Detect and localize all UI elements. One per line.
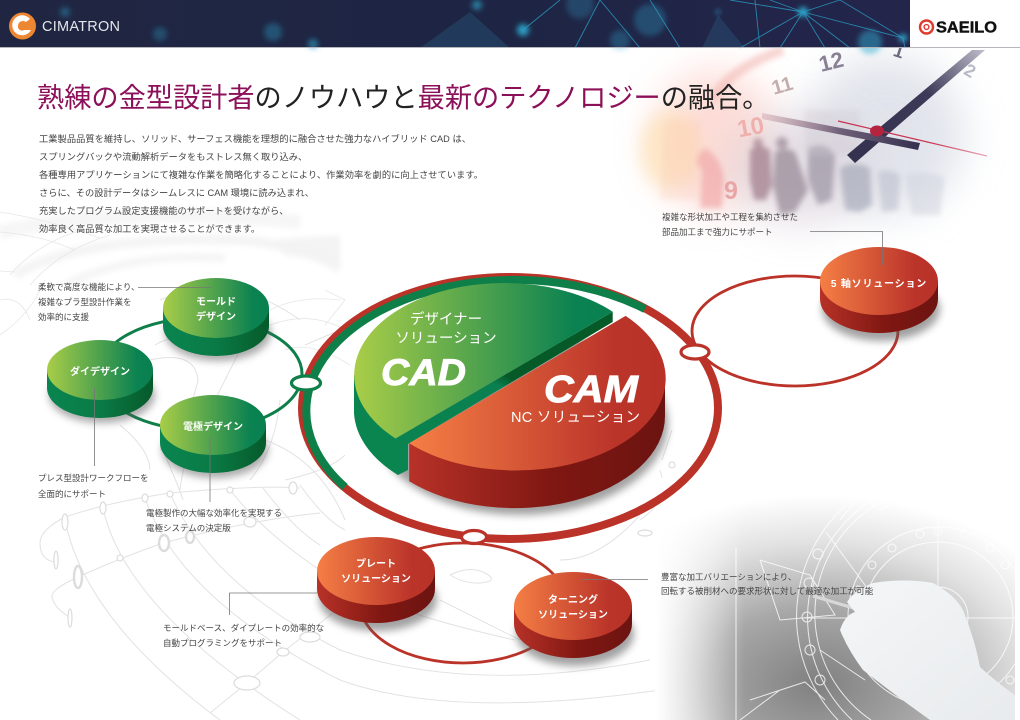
callout: mold design: 柔軟で高度な機能により、	[38, 282, 140, 292]
icon: hand with stylus	[813, 580, 1015, 720]
crowd	[660, 110, 945, 215]
cylinder: electrode design: 電極デザイン	[183, 420, 243, 433]
cylinder: turning solution: ターニング	[548, 593, 598, 606]
CAD segment: ソリューション	[395, 331, 497, 347]
intro text: さらに、その設計データはシームレスに CAM 環境に読み込まれ、	[39, 187, 314, 198]
circuit arcs lower left	[40, 289, 672, 720]
photo: clock and crowd	[640, 40, 987, 225]
intro text	[39, 133, 483, 234]
cylinder: electrode design	[160, 395, 268, 478]
intro text: 充実したプログラム設定支援機能のサポートを受けながら、	[39, 205, 288, 216]
clock numerals: 1	[891, 40, 907, 62]
title: 熟練の金型設計者のノウハウと最新のテクノロジーの融合。	[37, 82, 769, 113]
callout: die design: 全面的にサポート	[38, 489, 106, 499]
clock numerals: 9	[724, 177, 738, 205]
CAD segment	[354, 283, 613, 475]
CAM segment	[409, 316, 666, 508]
cylinder: mold design: モールド	[196, 296, 236, 308]
CAM segment: NC ソリューション	[511, 410, 640, 426]
logo: CIMATRON	[9, 12, 120, 40]
cylinder: turning solution	[514, 572, 634, 666]
callout: mold design	[38, 282, 212, 322]
cylinder: mold design: デザイン	[196, 310, 236, 323]
pie: CAD and CAM	[354, 283, 668, 515]
clock numerals: 11	[769, 73, 796, 100]
intro text: 工業製品品質を維持し、ソリッド、サーフェス機能を理想的に融合させた強力なハイブリッド CAD は、	[39, 133, 471, 144]
connector: green loop	[98, 318, 302, 430]
clock numerals	[724, 40, 979, 205]
cylinder: die design	[47, 340, 155, 423]
cylinder: turning solution: ソリューション	[538, 610, 608, 621]
callout: turning solution: 豊富な加工バリエーションにより、	[661, 572, 796, 582]
clock rim	[712, 50, 783, 100]
callout: five-axis: 部品加工まで強力にサポート	[662, 227, 773, 237]
CAM segment: CAM	[544, 369, 639, 411]
photo: hand and gear blueprint	[655, 466, 1015, 720]
CAD segment: デザイナー	[410, 310, 482, 328]
main ring	[302, 277, 718, 539]
logo: SAEILO	[910, 0, 1020, 47]
callout: die design	[38, 388, 149, 499]
cylinder: mold design	[163, 278, 271, 361]
intro text: 各種専用アプリケーションにて複雑な作業を簡略化することにより、作業効率を劇的に向上させています。	[39, 169, 483, 180]
callout: plate solution: 自動プログラミングをサポート	[163, 638, 282, 648]
cylinder: five-axis solution	[820, 247, 940, 341]
logo: SAEILO: SAEILO	[936, 20, 997, 36]
clock hands	[762, 50, 987, 163]
callout: electrode design: 電極システムの決定版	[146, 523, 231, 533]
intro text: 効率良く高品質な加工を実現させることができます。	[39, 223, 260, 234]
callout: plate solution: モールドベース、ダイプレートの効率的な	[163, 623, 324, 633]
header band	[0, 0, 1020, 54]
callout: five-axis: 複雑な形状加工や工程を集約させた	[662, 212, 798, 222]
ring joints	[292, 345, 709, 544]
intro text: スプリングバックや流動解析データをもストレス無く取り込み、	[39, 151, 307, 162]
connector: red loop five-axis	[692, 276, 898, 386]
cylinder: die design: ダイデザイン	[70, 365, 130, 378]
background technical line art	[0, 212, 675, 720]
connector: red loop plate and turning	[360, 543, 566, 663]
clock numerals: 12	[816, 47, 846, 77]
callout: turning solution	[582, 572, 874, 596]
logo: CIMATRON: CIMATRON	[42, 19, 120, 35]
callout: electrode design: 電極製作の大幅な効率化を実現する	[146, 508, 282, 518]
CAD segment: CAD	[381, 352, 466, 393]
circuit nodes	[54, 462, 675, 690]
cylinder: plate solution: プレート	[356, 558, 396, 570]
callout: die design: プレス型設計ワークフローを	[38, 473, 149, 483]
callout: mold design: 効率的に支援	[38, 312, 90, 322]
callout: electrode design	[146, 438, 282, 533]
pie shadow	[372, 331, 668, 515]
callout: five-axis	[662, 212, 882, 265]
cylinder: plate solution: ソリューション	[341, 574, 411, 585]
callout: mold design: 複雑なプラ型設計作業を	[38, 297, 132, 307]
callout: plate solution	[163, 593, 324, 648]
callout: turning solution: 回転する被削材への要求形状に対して最適な加工が可能	[661, 586, 874, 596]
cylinder: five-axis solution: 5 軸ソリューション	[831, 277, 927, 290]
clock numerals: 2	[961, 60, 979, 82]
cylinder: plate solution	[317, 537, 437, 631]
clock numerals: 10	[735, 112, 766, 143]
